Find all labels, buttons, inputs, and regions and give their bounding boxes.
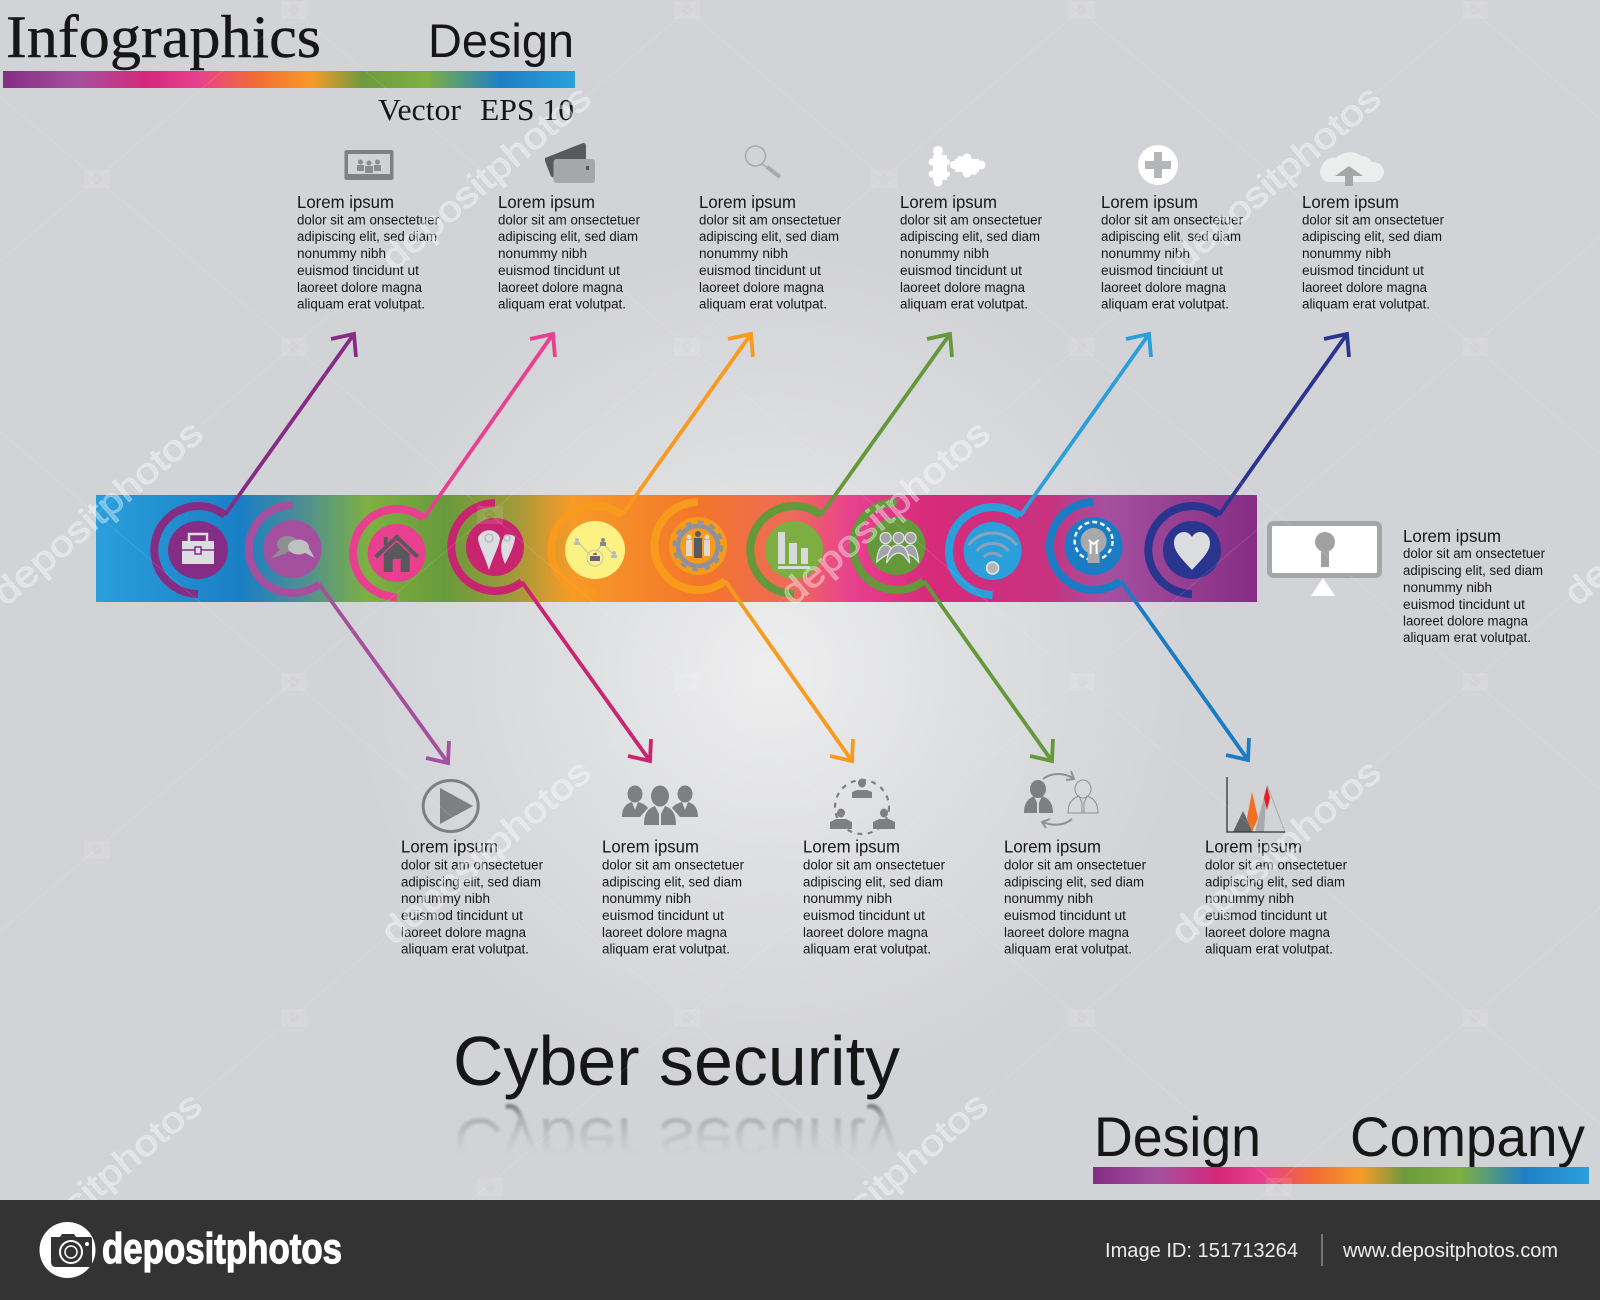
body text: euismod tincidunt ut — [699, 263, 821, 278]
heading: Design Company: Company — [1350, 1105, 1585, 1168]
body text: aliquam erat volutpat. — [498, 296, 626, 312]
body text: dolor sit am onsectetuer — [498, 212, 641, 228]
website: www.depositphotos.com — [1342, 1239, 1558, 1262]
body text: laoreet dolore magna — [803, 925, 929, 940]
panel: right text block: nonummy nibh — [1403, 580, 1492, 595]
icon: group of three people — [622, 786, 698, 825]
watermark overlay: depositphotos — [1163, 77, 1388, 278]
panel: right text block: laoreet dolore magna — [1403, 614, 1529, 628]
panel: right text block — [1403, 526, 1546, 645]
body text: nonummy nibh — [803, 891, 892, 906]
body text: euismod tincidunt ut — [602, 908, 724, 923]
body text — [1302, 212, 1445, 312]
body text: aliquam erat volutpat. — [297, 296, 425, 312]
body text — [900, 212, 1043, 312]
node 2: chat bubbles — [249, 505, 322, 593]
body text: aliquam erat volutpat. — [401, 942, 529, 956]
node 5: network on yellow disc — [551, 506, 625, 594]
body text: nonummy nibh — [1205, 891, 1294, 906]
body text: nonummy nibh — [602, 891, 691, 906]
heading: Design Company: Design — [1094, 1105, 1261, 1168]
body text: aliquam erat volutpat. — [1101, 296, 1229, 312]
body text: nonummy nibh — [699, 246, 788, 261]
icon: area chart — [1227, 777, 1285, 832]
icon: camera logo — [40, 1222, 96, 1278]
panel: top block 3 — [699, 146, 842, 312]
panel: bottom block 5 — [1205, 777, 1348, 956]
heading: Lorem ipsum — [1302, 192, 1399, 212]
body text: adipiscing elit, sed diam — [699, 229, 839, 244]
panel: right text block: adipiscing elit, sed diam — [1403, 563, 1543, 578]
body text: adipiscing elit, sed diam — [297, 229, 437, 244]
footer colour bar — [1093, 1167, 1589, 1184]
body text — [1205, 858, 1348, 956]
body text: aliquam erat volutpat. — [699, 296, 827, 312]
body text: nonummy nibh — [498, 246, 587, 261]
body text: laoreet dolore magna — [900, 280, 1026, 295]
body text: adipiscing elit, sed diam — [401, 874, 541, 890]
body text: euismod tincidunt ut — [1302, 263, 1424, 278]
up arrows — [225, 334, 1349, 518]
node 9: wifi — [949, 507, 1022, 595]
body text: aliquam erat volutpat. — [803, 942, 931, 956]
body text: euismod tincidunt ut — [297, 263, 419, 278]
panel: footer bar — [0, 1200, 1600, 1300]
body text — [401, 858, 544, 956]
body text: laoreet dolore magna — [1205, 925, 1331, 940]
body text: euismod tincidunt ut — [498, 263, 620, 278]
title: Infographics Design: Infographics — [6, 4, 321, 70]
body text — [699, 212, 842, 312]
body text: laoreet dolore magna — [1101, 280, 1227, 295]
node 8: three people — [853, 502, 926, 590]
heading: Lorem ipsum — [699, 192, 796, 212]
title colour bar — [3, 71, 575, 88]
heading: Lorem ipsum — [498, 192, 595, 212]
down arrows — [319, 581, 1249, 763]
body text: aliquam erat volutpat. — [900, 296, 1028, 312]
heading: Lorem ipsum — [1205, 836, 1302, 856]
node 10: light bulb — [1050, 502, 1123, 590]
icon: people exchange — [1024, 771, 1098, 828]
body text: aliquam erat volutpat. — [1004, 942, 1132, 956]
ribbon band — [96, 495, 1257, 602]
node 11: heart — [1148, 506, 1221, 594]
icon: magnifier — [746, 146, 780, 177]
body text: adipiscing elit, sed diam — [602, 874, 742, 890]
body text: nonummy nibh — [1004, 891, 1093, 906]
body text: euismod tincidunt ut — [803, 908, 925, 923]
body text: euismod tincidunt ut — [900, 263, 1022, 278]
body text: dolor sit am onsectetuer — [1302, 212, 1445, 228]
body text: laoreet dolore magna — [699, 280, 825, 295]
heading: Lorem ipsum — [401, 836, 498, 856]
body text: laoreet dolore magna — [1302, 280, 1428, 295]
body text: nonummy nibh — [1302, 246, 1391, 261]
body text: laoreet dolore magna — [297, 280, 423, 295]
heading: Lorem ipsum — [1101, 192, 1198, 212]
node 7: bar chart — [750, 506, 823, 594]
icon: wallet cards — [545, 143, 595, 183]
body text: euismod tincidunt ut — [1101, 263, 1223, 278]
body text: laoreet dolore magna — [602, 925, 728, 940]
body text: laoreet dolore magna — [1004, 925, 1130, 940]
panel: top block 1 — [297, 150, 440, 312]
body text: dolor sit am onsectetuer — [803, 858, 946, 872]
subtitle: Vector EPS 10 — [378, 92, 574, 127]
heading: Lorem ipsum — [1004, 836, 1101, 856]
panel: bottom block 1 — [401, 780, 544, 956]
icon: cloud upload — [1320, 152, 1384, 186]
node 3: house — [353, 509, 426, 597]
body text: adipiscing elit, sed diam — [1205, 874, 1345, 890]
body text: aliquam erat volutpat. — [1302, 296, 1430, 312]
image id: Image ID: 151713264 — [1105, 1239, 1298, 1262]
body text: nonummy nibh — [900, 246, 989, 261]
title: Infographics Design: Design — [428, 14, 574, 67]
icon: team circle — [830, 778, 895, 834]
icon: monitor with keyhole — [1270, 524, 1380, 596]
body text: dolor sit am onsectetuer — [602, 858, 745, 872]
panel: bottom block 2 — [602, 786, 745, 956]
panel: right text block: aliquam erat volutpat. — [1403, 630, 1531, 645]
body text: dolor sit am onsectetuer — [1004, 858, 1147, 872]
body text: adipiscing elit, sed diam — [1302, 229, 1442, 244]
body text: adipiscing elit, sed diam — [1004, 874, 1144, 890]
body text: adipiscing elit, sed diam — [803, 874, 943, 890]
body text: adipiscing elit, sed diam — [900, 229, 1040, 244]
body text: nonummy nibh — [401, 891, 490, 906]
logo wordmark: depositphotos — [102, 1225, 342, 1273]
body text: dolor sit am onsectetuer — [401, 858, 544, 872]
node 4: map pins — [451, 503, 524, 591]
body text: adipiscing elit, sed diam — [1101, 229, 1241, 244]
body text — [1004, 858, 1147, 956]
heading reflection: Cyber security — [453, 1104, 900, 1182]
body text — [498, 212, 641, 312]
subtitle: Vector EPS 10: Vector — [378, 92, 462, 127]
icon: plus in circle — [1138, 145, 1178, 185]
panel: bottom block 3 — [803, 778, 946, 956]
icon: tablet with team — [344, 150, 394, 180]
panel: right text block: euismod tincidunt ut — [1403, 597, 1525, 612]
heading: Lorem ipsum — [803, 836, 900, 856]
body text — [1101, 212, 1244, 312]
body text: dolor sit am onsectetuer — [1101, 212, 1244, 228]
panel: top block 2 — [498, 143, 641, 312]
body text — [803, 858, 946, 956]
heading: Lorem ipsum — [900, 192, 997, 212]
body text: nonummy nibh — [297, 246, 386, 261]
body text: dolor sit am onsectetuer — [1205, 858, 1348, 872]
body text — [297, 212, 440, 312]
icon: play button — [423, 780, 478, 832]
panel: top block 4 — [900, 146, 1043, 312]
node 1: briefcase — [154, 506, 228, 594]
body text: aliquam erat volutpat. — [1205, 942, 1333, 956]
watermark overlay: depositphotos — [373, 751, 598, 952]
body text: euismod tincidunt ut — [1205, 908, 1327, 923]
watermark overlay: depositphotos — [772, 412, 997, 613]
watermark overlay: depositphotos — [1163, 751, 1388, 952]
body text: euismod tincidunt ut — [1004, 908, 1126, 923]
icon: puzzle pieces — [928, 146, 986, 186]
heading: Lorem ipsum — [602, 836, 699, 856]
watermark overlay: depositphotos — [373, 77, 598, 278]
heading: Lorem ipsum — [297, 192, 394, 212]
body text: adipiscing elit, sed diam — [498, 229, 638, 244]
title: Infographics Design — [6, 4, 574, 70]
panel: top block 5 — [1101, 145, 1244, 312]
node 6: gear with team — [654, 502, 727, 590]
panel: right text block: dolor sit am onsectetuer — [1403, 546, 1546, 561]
body text: aliquam erat volutpat. — [602, 942, 730, 956]
body text: nonummy nibh — [1101, 246, 1190, 261]
subtitle: Vector EPS 10: EPS 10 — [480, 92, 574, 127]
heading: Cyber security: Cyber security — [453, 1022, 900, 1100]
watermark overlay: depositphotos — [770, 1084, 995, 1285]
body text: dolor sit am onsectetuer — [297, 212, 440, 228]
body text: dolor sit am onsectetuer — [699, 212, 842, 228]
panel: top block 6 — [1302, 152, 1445, 312]
body text — [602, 858, 745, 956]
heading: Design Company — [1094, 1105, 1585, 1168]
body text: laoreet dolore magna — [401, 925, 527, 940]
body text: laoreet dolore magna — [498, 280, 624, 295]
panel: bottom block 4 — [1004, 771, 1147, 956]
panel: timeline ribbon — [96, 495, 1257, 602]
body text: dolor sit am onsectetuer — [900, 212, 1043, 228]
panel: right text block: Lorem ipsum — [1403, 526, 1501, 546]
body text: euismod tincidunt ut — [401, 908, 523, 923]
